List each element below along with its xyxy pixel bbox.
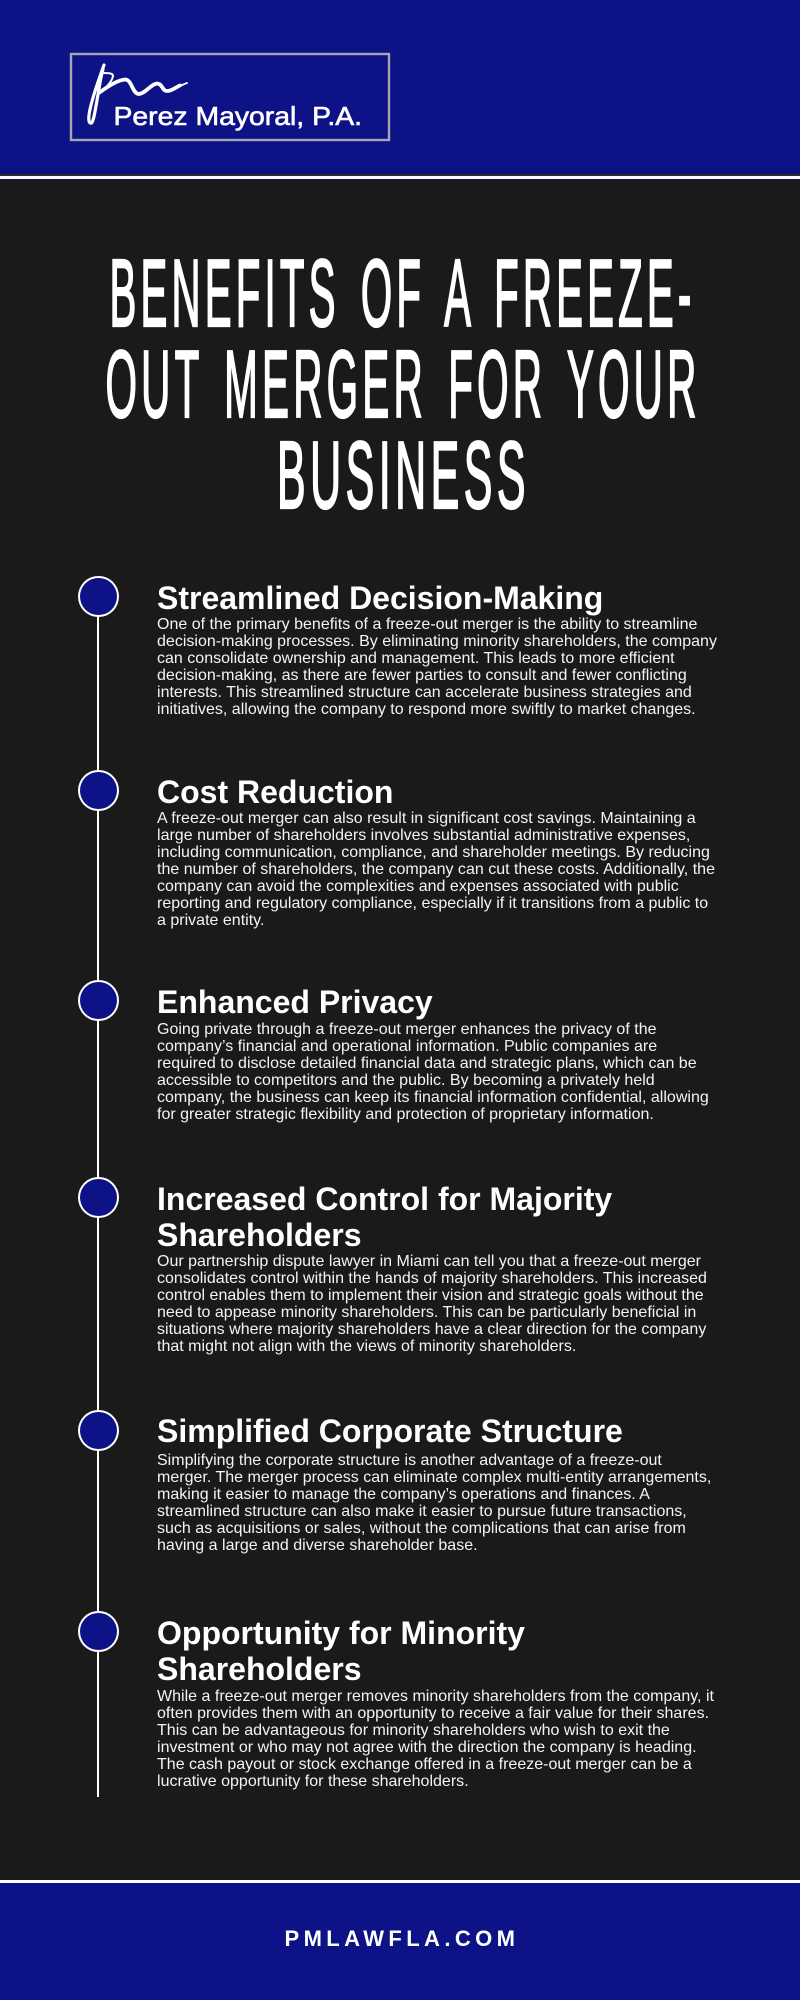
benefit: Enhanced Privacy: for greater strategic flexibility and protection of proprietary information. [157,1106,654,1123]
benefit: Simplified Corporate Structure: merger. The merger process can eliminate complex multi-entity arrangements, [157,1469,711,1486]
benefit: Increased Control for Majority Shareholders: need to appease minority shareholders. This can be particularly beneficial in [157,1304,696,1321]
benefit: Cost Reduction: company can avoid the complexities and expenses associated with public [157,878,679,895]
timeline dot 4 [78,1177,118,1218]
logo box [70,52,390,142]
benefit: Opportunity for Minority Shareholders: lucrative opportunity for these shareholders. [157,1773,469,1790]
footer divider [0,1880,800,1883]
benefit: Simplified Corporate Structure: having a large and diverse shareholder base. [157,1537,478,1554]
benefit: Opportunity for Minority Shareholders: The cash payout or stock exchange offered in a freeze-out merger can be a [157,1756,692,1773]
timeline line [97,596,99,1797]
benefit: Streamlined Decision-Making [157,580,717,718]
benefit: Cost Reduction: reporting and regulatory compliance, especially if it transitions from a public to [157,895,708,912]
benefit: Enhanced Privacy: required to disclose detailed financial data and strategic plans, which can be [157,1055,697,1072]
logo wordmark: Perez Mayoral, P.A. [114,101,362,131]
header divider [0,174,800,176]
benefit: Increased Control for Majority Shareholders: Increased Control for Majority [157,1181,612,1217]
benefit: Enhanced Privacy: company’s financial and operational information. Public companies are [157,1038,657,1055]
benefit: Streamlined Decision-Making: decision-making processes. By eliminating minority shareholders, the company [157,633,717,650]
header band [0,0,800,180]
timeline dot 6 [78,1611,118,1652]
benefit: Cost Reduction [157,774,715,929]
footer website: PMLAWFLA.COM [284,1926,519,1951]
timeline dot 1 [78,576,118,617]
benefit: Increased Control for Majority Shareholders: situations where majority shareholders have a clear direction for the company [157,1321,706,1338]
benefit: Opportunity for Minority Shareholders: Opportunity for Minority [157,1615,525,1651]
benefit: Increased Control for Majority Shareholders: that might not align with the views of minority shareholders. [157,1338,576,1355]
benefit: Increased Control for Majority Shareholders: Our partnership dispute lawyer in Miami can tell you that a freeze-out merger [157,1253,701,1270]
benefit: Streamlined Decision-Making: can consolidate ownership and management. This leads to more efficient [157,650,675,667]
benefit: Opportunity for Minority Shareholders [157,1615,714,1790]
benefit: Opportunity for Minority Shareholders: While a freeze-out merger removes minority shareholders from the company, it [157,1688,714,1705]
benefit: Opportunity for Minority Shareholders: This can be advantageous for minority shareholders who wish to exit the [157,1722,670,1739]
timeline dot 2 [78,770,118,810]
benefit: Enhanced Privacy: Going private through a freeze-out merger enhances the privacy of the [157,1021,657,1038]
benefit: Cost Reduction: Cost Reduction [157,774,393,810]
benefit: Enhanced Privacy [157,984,709,1123]
benefit: Opportunity for Minority Shareholders: investment or who may not agree with the direction the company is heading. [157,1739,697,1756]
benefit: Simplified Corporate Structure [157,1413,711,1554]
timeline dot 5 [78,1410,118,1450]
benefit: Cost Reduction: including communication, compliance, and shareholder meetings. By reducing [157,844,710,861]
benefit: Increased Control for Majority Shareholders [157,1181,707,1355]
benefit: Enhanced Privacy: Enhanced Privacy [157,984,433,1020]
benefit: Increased Control for Majority Shareholders: Shareholders [157,1217,362,1253]
benefit: Cost Reduction: large number of shareholders involves substantial administrative expenses, [157,827,690,844]
benefit: Cost Reduction: A freeze-out merger can also result in significant cost savings. Maintaining a [157,810,696,827]
benefit: Increased Control for Majority Shareholders: consolidates control within the hands of majority shareholders. This increased [157,1270,707,1287]
benefit: Simplified Corporate Structure: Simplifying the corporate structure is another advantage of a freeze-out [157,1452,662,1469]
benefit: Enhanced Privacy: accessible to competitors and the public. By becoming a privately held [157,1072,655,1089]
benefit: Enhanced Privacy: company, the business can keep its financial information confidential, allowing [157,1089,709,1106]
benefit: Cost Reduction: the number of shareholders, the company can cut these costs. Additionally, the [157,861,715,878]
benefit: Opportunity for Minority Shareholders: often provides them with an opportunity to receive a fair value for their shares. [157,1705,709,1722]
benefit: Streamlined Decision-Making: decision-making, as there are fewer parties to consult and fewer conflicting [157,667,687,684]
benefit: Streamlined Decision-Making: initiatives, allowing the company to respond more swiftly to market changes. [157,701,696,718]
title [106,240,700,529]
benefit: Streamlined Decision-Making: Streamlined Decision-Making [157,580,603,616]
benefit: Simplified Corporate Structure: streamlined structure can also make it easier to pursue future transactions, [157,1503,687,1520]
benefit: Simplified Corporate Structure: such as acquisitions or sales, without the complications that can arise from [157,1520,686,1537]
benefit: Opportunity for Minority Shareholders: Shareholders [157,1651,362,1687]
benefit: Increased Control for Majority Shareholders: control enables them to implement their vision and strategic goals without the [157,1287,704,1304]
benefit: Simplified Corporate Structure: Simplified Corporate Structure [157,1413,623,1449]
benefit: Simplified Corporate Structure: making it easier to manage the company’s operations and finances. A [157,1486,650,1503]
benefit: Streamlined Decision-Making: One of the primary benefits of a freeze-out merger is the ability to streamline [157,616,697,633]
benefit: Streamlined Decision-Making: interests. This streamlined structure can accelerate business strategies and [157,684,692,701]
timeline dot 3 [78,980,118,1021]
benefit: Cost Reduction: a private entity. [157,912,264,929]
icon: signature mark [89,65,187,123]
footer band [0,1883,800,2000]
